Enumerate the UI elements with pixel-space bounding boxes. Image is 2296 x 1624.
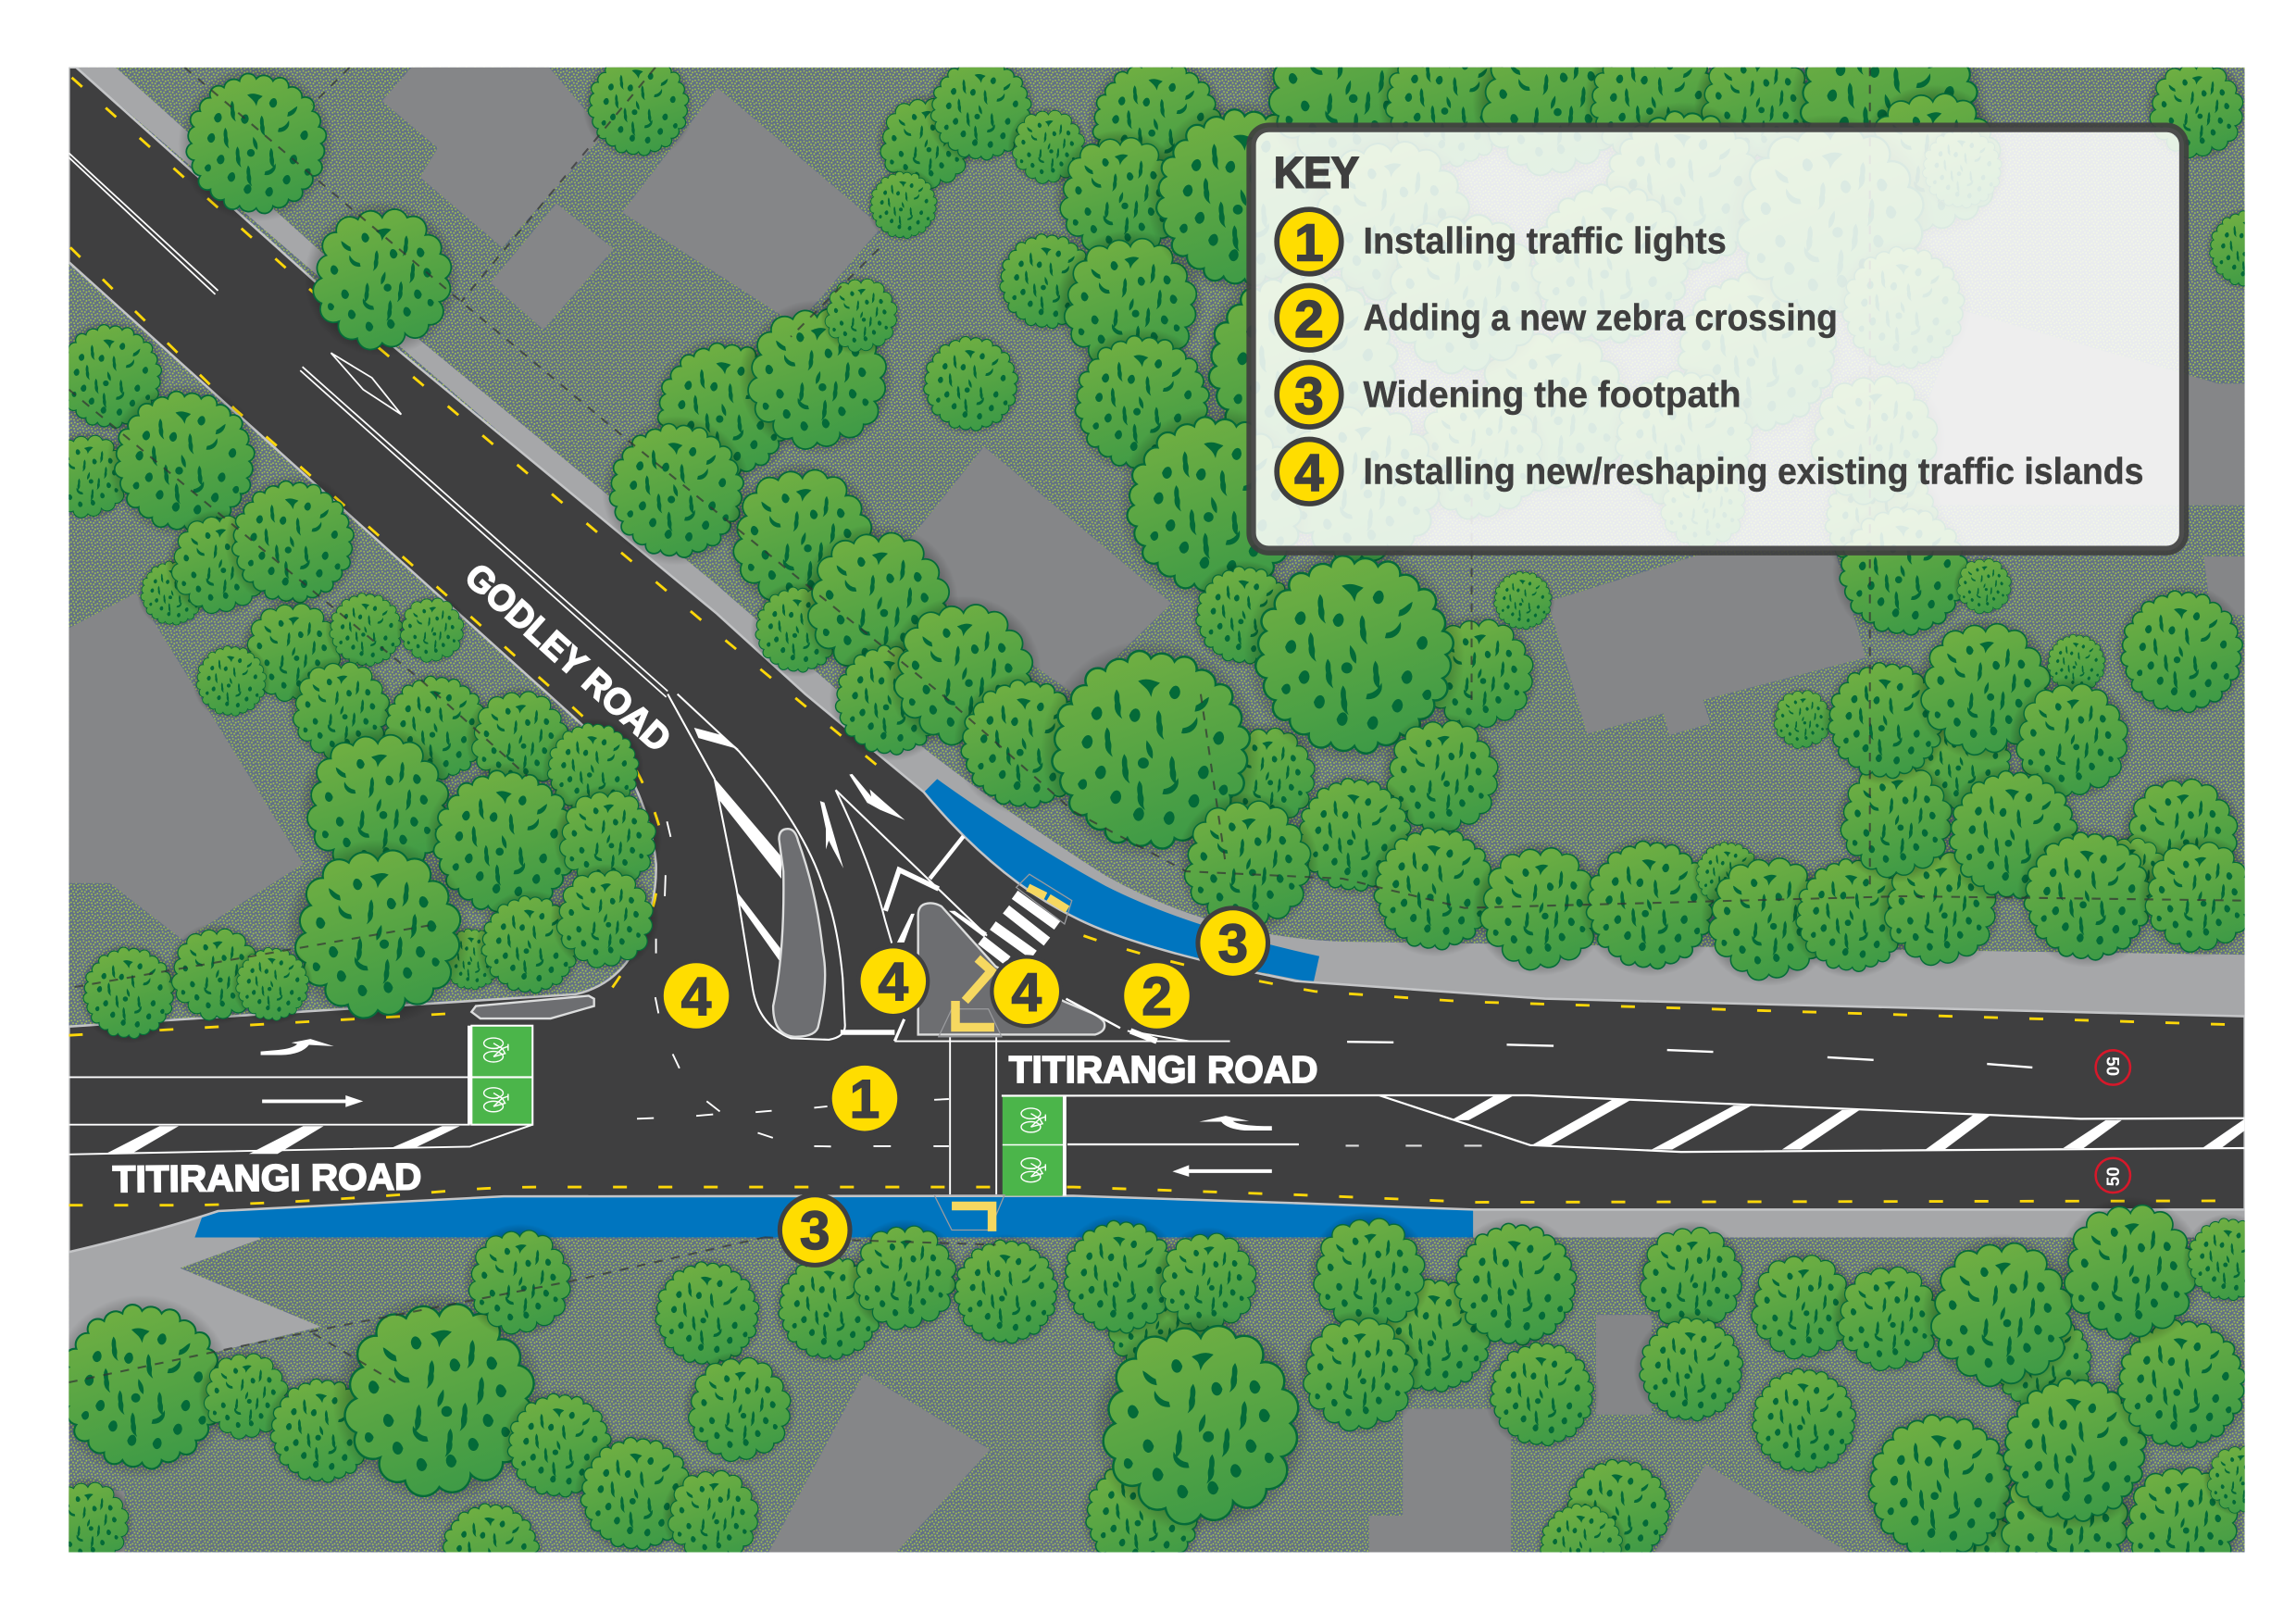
marker 4: pedestrian island: 4 (1011, 962, 1042, 1022)
marker 4: western island (660, 960, 732, 1031)
marker 3: south footpath: 3 (800, 1201, 830, 1261)
road label: Titirangi Road west: TITIRANGI ROAD (112, 1156, 422, 1200)
eastern arrows (1172, 1116, 1272, 1177)
western arrows (261, 1039, 363, 1107)
Godley Road lane lines (69, 153, 668, 697)
road surface (69, 68, 2245, 1252)
key item 1 (1277, 209, 1727, 274)
key item 1: 1 (1294, 214, 1324, 273)
key item 2: Adding a new zebra crossing (1363, 298, 1838, 339)
hatching on Godley Road approach (694, 728, 987, 964)
small island west (471, 995, 594, 1018)
zebra crossing (981, 894, 1057, 961)
key item 2 (1277, 285, 1838, 350)
left channel island lines (668, 694, 987, 1040)
footpaths (69, 68, 2245, 1384)
cycle boxes west (469, 1026, 532, 1125)
trees: south of Titirangi Road (42, 1196, 2277, 1606)
key item 3: 3 (1294, 367, 1324, 426)
property boundary dashed lines (69, 68, 2245, 1382)
road label: Godley Road: GODLEY ROAD (457, 556, 679, 760)
tactile paving (934, 874, 1072, 1231)
speed marking 50 eastbound (2096, 1050, 2130, 1085)
marker 4: pedestrian island (990, 955, 1063, 1028)
trees: east of the junction (1041, 500, 2261, 986)
key heading: KEY (1274, 148, 1359, 197)
trees: wedge west of Godley Road (42, 319, 662, 1043)
yellow edge lines (69, 78, 2245, 1206)
marker 1: traffic lights: 1 (850, 1069, 880, 1130)
channel island (773, 829, 825, 1037)
speed marking 50 westbound: 50 (2104, 1167, 2124, 1186)
marker 2: zebra crossing (1121, 960, 1192, 1031)
trees: upper right behind the key (994, 0, 2290, 604)
marker 4: channel island (856, 944, 930, 1018)
key item 4: Installing new/reshaping existing traffic islands (1363, 452, 2143, 493)
marker 2: zebra crossing: 2 (1142, 967, 1172, 1027)
trees: top left and top centre (178, 49, 1096, 816)
widened footpaths: blue (194, 779, 1473, 1237)
key item 3 (1277, 362, 1741, 427)
speed marking 50 westbound (2096, 1158, 2130, 1193)
marker 1: traffic lights (829, 1062, 901, 1134)
key item 3: Widening the footpath (1363, 375, 1741, 416)
western hatching (106, 1126, 460, 1154)
eastern hatching (1451, 1095, 2245, 1150)
speed marking 50 eastbound: 50 (2103, 1056, 2122, 1076)
key item 4: 4 (1294, 443, 1324, 503)
Godley Road arrows (820, 774, 905, 868)
marker 3: north footpath: 3 (1217, 914, 1248, 974)
key item 2: 2 (1294, 290, 1324, 349)
key background (1252, 128, 2184, 551)
junction chevrons (841, 836, 964, 1042)
marker 4: channel island: 4 (879, 952, 909, 1012)
dashed junction and centre lines (637, 821, 2032, 1146)
cycle boxes east (1003, 1095, 1065, 1196)
panel: key (1252, 128, 2184, 551)
western approach markings (69, 1077, 532, 1155)
eastern lane lines and taper (1002, 1095, 2245, 1152)
marker 3: north footpath (1195, 906, 1270, 981)
key item 4 (1277, 439, 2143, 504)
road label: Titirangi Road east: TITIRANGI ROAD (1009, 1048, 1317, 1091)
triangular pedestrian island (918, 903, 1104, 1034)
junction stop lines and crossing outline (894, 999, 1230, 1196)
marker 3: south footpath (778, 1193, 853, 1268)
key item 1: Installing traffic lights (1363, 221, 1727, 262)
marker 4: western island: 4 (681, 967, 712, 1027)
